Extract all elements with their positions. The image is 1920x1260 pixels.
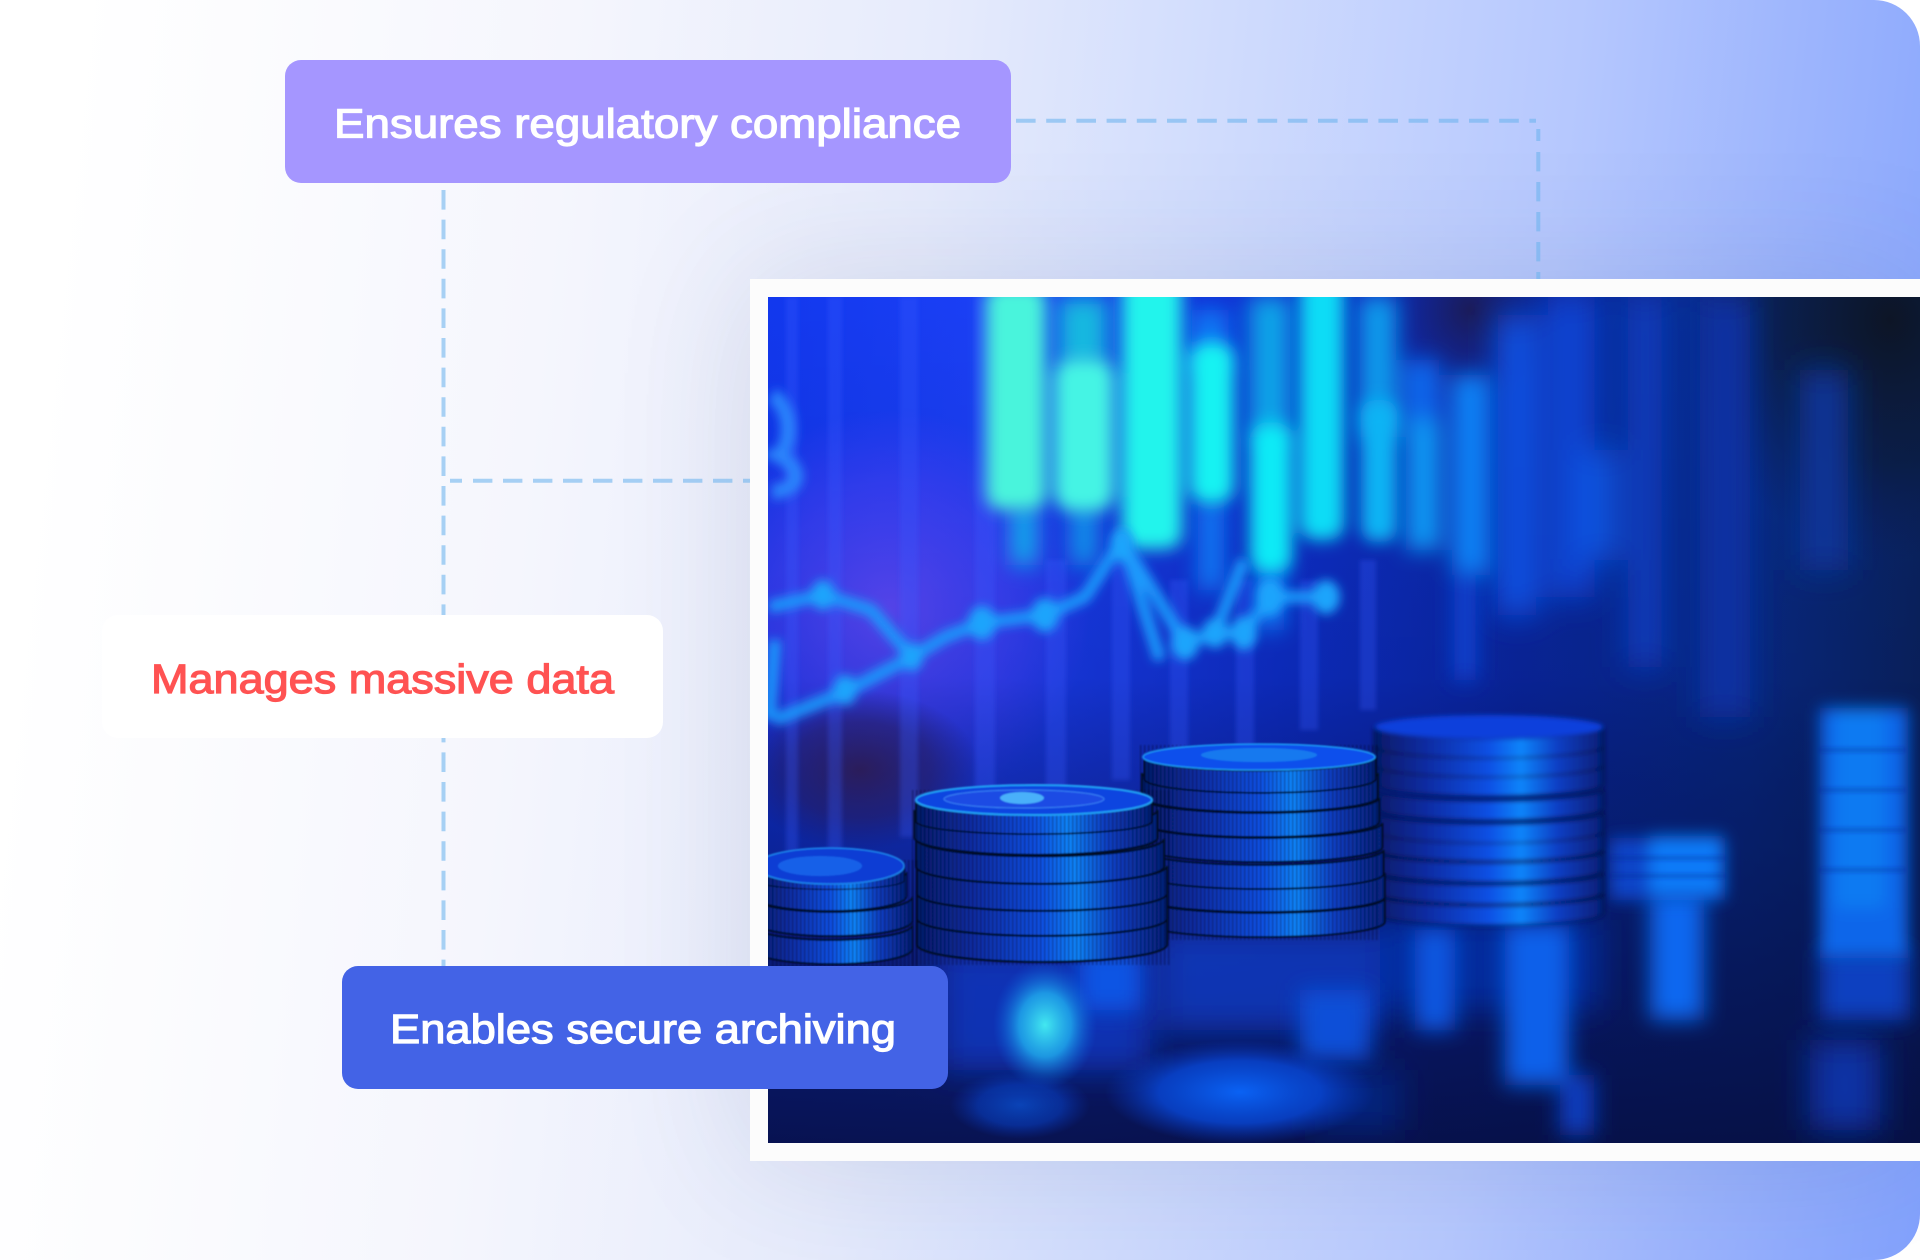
coin stack 4 bbox=[1375, 715, 1603, 925]
button: Enables secure archiving bbox=[342, 966, 948, 1089]
blurred background coin stacks bbox=[1610, 708, 1908, 958]
button: Manages massive data bbox=[102, 615, 663, 738]
coin stack 3 bbox=[1139, 744, 1385, 940]
photo backdrop bbox=[690, 80, 1920, 1143]
blurred candlestick chart bbox=[986, 275, 1848, 717]
button: Manages massive data: Manages massive data bbox=[151, 656, 614, 702]
button: Ensures regulatory compliance: Ensures regulatory compliance bbox=[334, 101, 961, 147]
coin stack 1 bbox=[752, 848, 918, 970]
button: Enables secure archiving: Enables secure archiving bbox=[390, 1006, 896, 1052]
button: Ensures regulatory compliance bbox=[285, 60, 1011, 183]
coin stack 2 bbox=[910, 785, 1172, 965]
photo: coin stacks in front of a market chart bbox=[768, 297, 1920, 1143]
floor reflections bbox=[940, 890, 1910, 1144]
image frame bbox=[750, 279, 1920, 1161]
blurred trend line bbox=[769, 395, 1340, 720]
